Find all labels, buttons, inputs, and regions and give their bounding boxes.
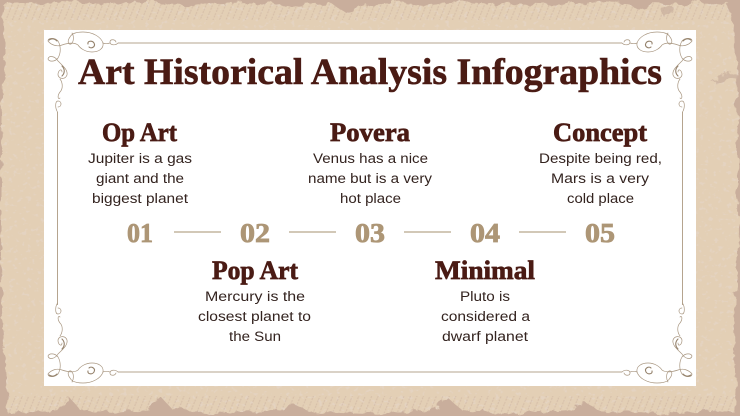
heading: Minimal: Minimal xyxy=(435,256,535,285)
description: Minimal: Pluto is xyxy=(460,289,510,305)
connector lines xyxy=(174,231,566,233)
item: Concept xyxy=(539,118,662,207)
heading: Concept: Concept xyxy=(553,118,647,147)
description: Op Art: biggest planet xyxy=(92,191,188,207)
description: Concept: Despite being red, xyxy=(539,151,662,167)
description: Pop Art: the Sun xyxy=(229,329,281,345)
description: Op Art xyxy=(88,151,192,207)
description: Minimal: considered a xyxy=(441,309,530,325)
title: Art Historical Analysis Infographics xyxy=(78,52,662,93)
description: Pop Art: closest planet to xyxy=(198,309,311,325)
item: Minimal xyxy=(435,256,535,345)
item: Pop Art xyxy=(198,256,311,345)
description: Povera: Venus has a nice xyxy=(313,151,428,167)
description: Povera xyxy=(308,151,433,207)
description: Concept xyxy=(539,151,662,207)
heading: Povera: Povera xyxy=(330,118,410,147)
description: Pop Art: Mercury is the xyxy=(205,289,305,305)
timeline xyxy=(127,218,615,248)
number 03: 03 xyxy=(355,218,385,248)
description: Povera: hot place xyxy=(340,191,401,207)
white panel xyxy=(44,30,696,386)
number 01: 01 xyxy=(127,218,153,248)
ornamental frame xyxy=(48,32,692,383)
description: Concept: Mars is a very xyxy=(551,171,650,187)
heading: Op Art: Op Art xyxy=(102,118,177,147)
number 02: 02 xyxy=(240,218,270,248)
heading: Pop Art: Pop Art xyxy=(212,256,298,285)
item: Op Art xyxy=(88,118,192,207)
description: Op Art: giant and the xyxy=(96,171,184,187)
description: Pop Art xyxy=(198,289,311,345)
item: Povera xyxy=(308,118,433,207)
description: Minimal: dwarf planet xyxy=(442,329,528,345)
description: Povera: name but is a very xyxy=(308,171,433,187)
description: Concept: cold place xyxy=(567,191,634,207)
number 05: 05 xyxy=(585,218,615,248)
description: Minimal xyxy=(441,289,530,345)
number 04: 04 xyxy=(470,218,500,248)
description: Op Art: Jupiter is a gas xyxy=(88,151,192,167)
